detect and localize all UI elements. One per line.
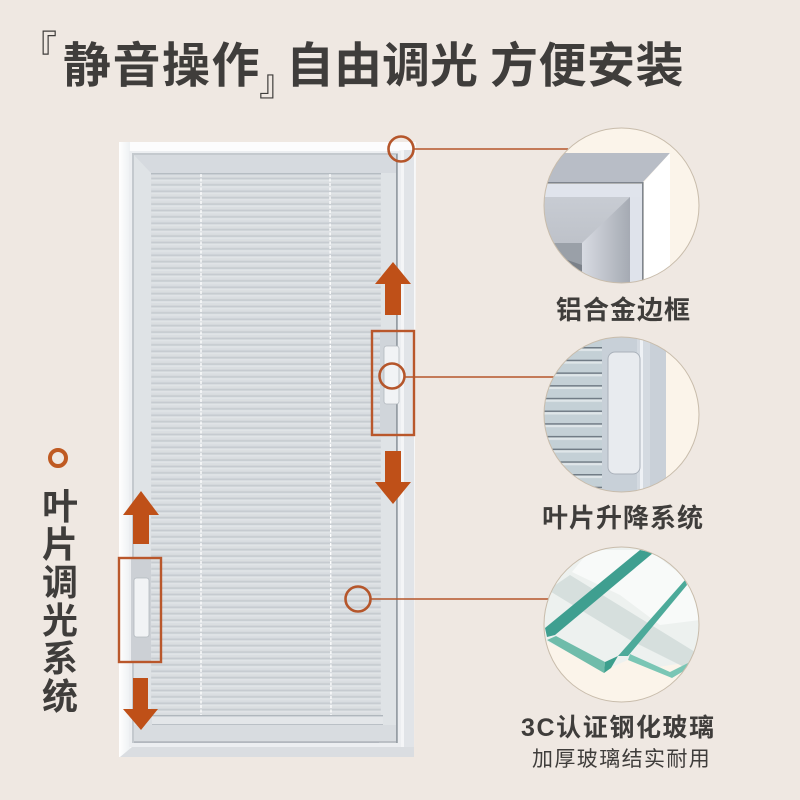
arrow: right down <box>375 451 411 504</box>
glass sheets <box>544 547 700 670</box>
callout marker: lift handle <box>380 364 554 388</box>
blind slats <box>151 173 381 716</box>
label: tempered glass: 3C认证钢化玻璃 <box>521 714 716 742</box>
inset: aluminium frame corner <box>544 128 700 284</box>
arrow: right up <box>375 262 411 315</box>
ladder cords <box>200 174 202 716</box>
title: 静音操作 <box>63 40 261 93</box>
door with blinds <box>119 142 416 757</box>
arrow: left down <box>123 678 158 730</box>
inset rim: lift <box>544 337 699 492</box>
bottom rail <box>152 715 383 725</box>
title: 』 <box>259 62 295 103</box>
label: lift system: 叶片升降系统 <box>542 503 704 533</box>
left track strip <box>131 558 151 662</box>
right track line <box>396 154 398 743</box>
outer white frame <box>119 142 416 757</box>
inset rim: glass <box>544 547 699 702</box>
callout marker: frame corner <box>388 136 568 162</box>
title <box>21 28 684 103</box>
title: 自由调光 <box>286 40 478 93</box>
vertical label: blade dimming system <box>42 486 78 717</box>
vertical label: blade dimming system: 片 <box>42 524 78 565</box>
right track strip <box>380 331 396 435</box>
vertical label: blade dimming system: 调 <box>42 562 78 603</box>
callout marker: glass <box>346 586 548 612</box>
inset rim: frame <box>544 128 699 283</box>
arrow: left up <box>123 491 159 544</box>
teal edges <box>545 550 653 637</box>
label: aluminium frame: 铝合金边框 <box>556 295 691 325</box>
title: 方便安装 <box>490 40 684 93</box>
slider handle: right <box>384 346 399 404</box>
inset: tempered glass <box>544 547 700 703</box>
highlight box: right handle <box>372 331 414 435</box>
marker dot: blade dimming <box>50 450 66 466</box>
vertical label: blade dimming system: 系 <box>42 638 78 679</box>
vertical label: blade dimming system: 叶 <box>42 486 78 527</box>
slider handle: left <box>134 578 149 637</box>
sub-label: glass note: 加厚玻璃结实耐用 <box>532 748 711 771</box>
highlight box: left handle <box>119 558 161 662</box>
title: 『 <box>21 28 57 69</box>
vertical label: blade dimming system: 光 <box>42 600 78 641</box>
vertical label: blade dimming system: 统 <box>42 676 78 717</box>
inset: lift system <box>544 337 700 493</box>
